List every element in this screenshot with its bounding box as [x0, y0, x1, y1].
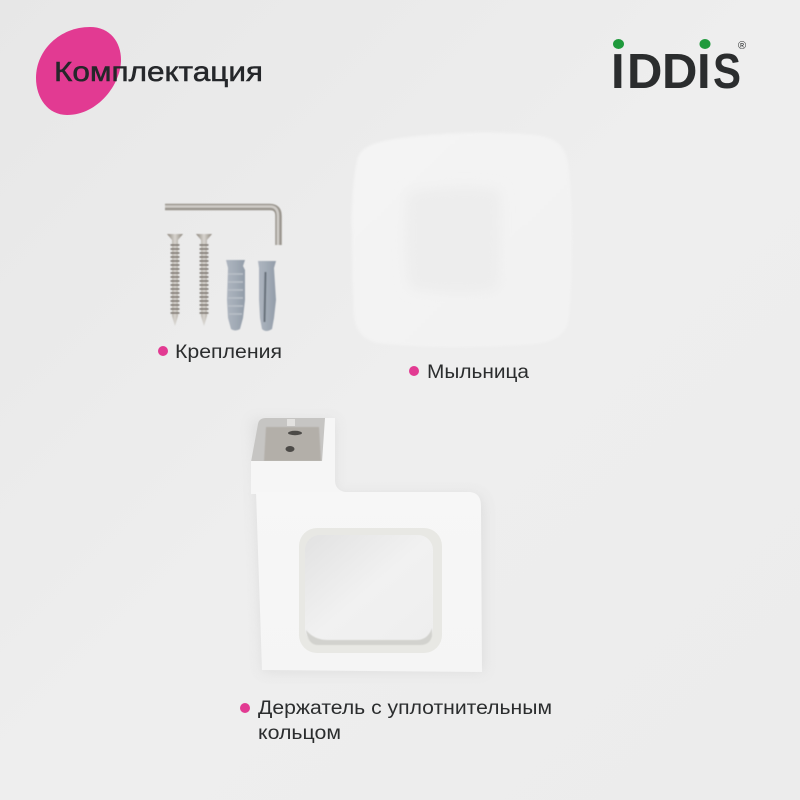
product: holder with sealing ring	[251, 418, 484, 672]
logo wordmark: IDDI	[611, 45, 711, 99]
holder plate	[256, 492, 482, 672]
product: screws	[167, 234, 212, 326]
logo final letter: S	[713, 45, 741, 99]
window	[305, 535, 433, 644]
product: soap dish	[352, 133, 572, 347]
label: Держатель с уплотнительным кольцом	[240, 698, 552, 744]
product: wall plugs	[226, 260, 276, 331]
screw 1	[167, 234, 183, 326]
label text: Мыльница	[427, 362, 529, 383]
plug 1	[226, 260, 245, 330]
holder mount	[251, 418, 345, 494]
label text: Крепления	[175, 342, 282, 363]
holder shadow	[252, 420, 484, 672]
logo registered mark: ®	[738, 40, 746, 52]
bullet	[240, 703, 250, 713]
label text: кольцом	[258, 723, 341, 744]
screw 2	[196, 234, 212, 326]
sealing ring	[299, 528, 442, 653]
dish body	[352, 133, 572, 347]
heading: Комплектация	[36, 27, 263, 115]
logo green dots	[613, 39, 710, 49]
logo: IDDIS	[611, 39, 746, 99]
dish inner well	[406, 187, 501, 293]
bullet	[409, 366, 419, 376]
product: hex key	[165, 206, 278, 245]
label text: Держатель с уплотнительным	[258, 698, 552, 719]
plug 2	[258, 261, 276, 331]
heading text: Комплектация	[54, 56, 263, 87]
bullet	[158, 346, 168, 356]
label: Мыльница	[409, 362, 529, 383]
icon: pink blob	[36, 27, 121, 115]
label: Крепления	[158, 342, 282, 363]
